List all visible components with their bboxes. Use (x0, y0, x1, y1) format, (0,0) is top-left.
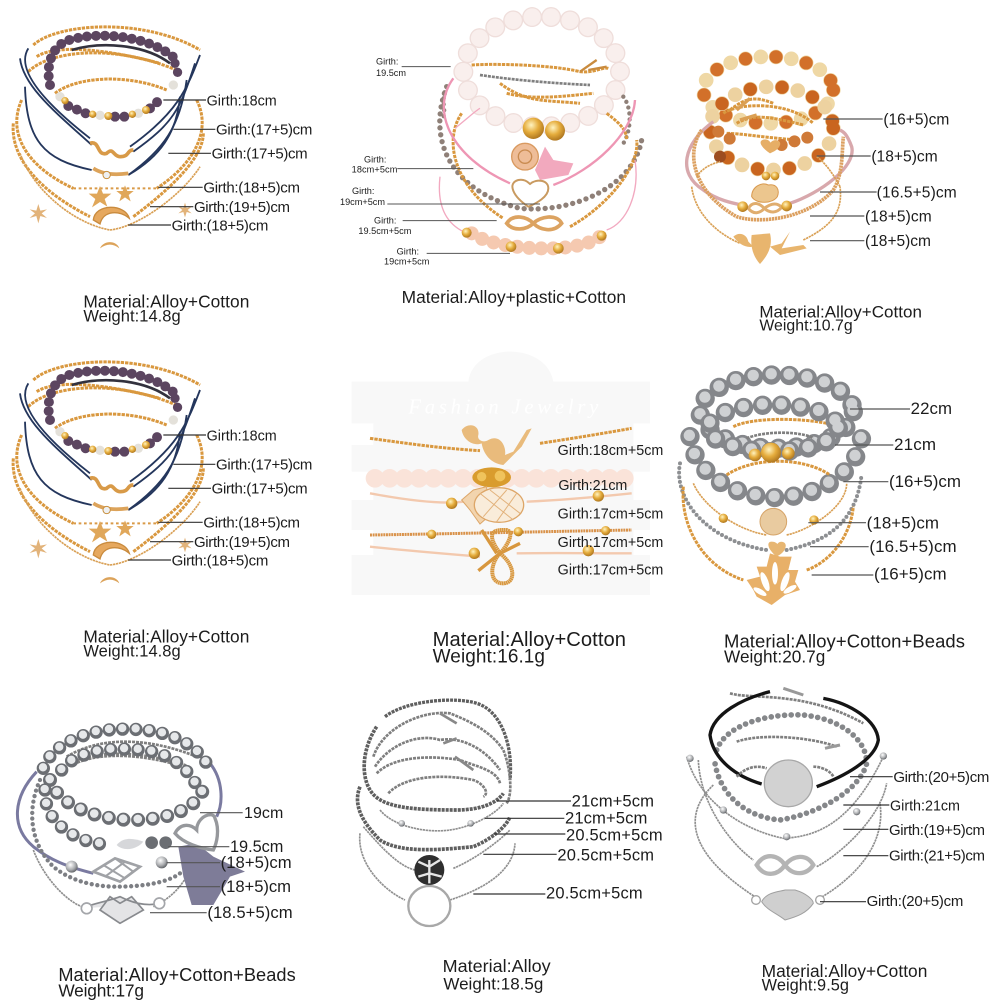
card script title: Fashion Jewelry (407, 396, 599, 418)
girth labels: Girth: (374, 215, 396, 225)
girth labels: 18cm+5cm (352, 165, 398, 175)
girth labels: Girth:21cm (890, 799, 960, 815)
girth labels: Girth:(20+5)cm (867, 893, 963, 910)
display card (352, 352, 650, 595)
artwork: pink bead and heart set (439, 17, 642, 254)
girth labels: 21cm+5cm (572, 792, 654, 811)
girth labels (808, 399, 961, 584)
artwork: flamingo, rose, pineapple and bow bracelets (370, 425, 632, 583)
girth labels: Girth:(17+5)cm (212, 481, 308, 498)
artwork: black cord, infinity and hamsa set (686, 688, 887, 920)
girth labels: (16.5+5)cm (877, 184, 957, 201)
girth labels: Girth:18cm (207, 93, 277, 109)
material and weight: Weight:10.7g (759, 318, 853, 335)
girth labels: (18.5+5)cm (207, 903, 293, 922)
girth labels: Girth:21cm (558, 478, 627, 494)
girth labels: Girth:(21+5)cm (889, 848, 985, 865)
panel: bracelet set 8 (357, 700, 663, 993)
girth labels: 19cm+5cm (340, 197, 385, 207)
girth labels: 19.5cm (230, 838, 283, 856)
girth labels: (16+5)cm (883, 111, 949, 128)
artwork: amber bead set (687, 57, 852, 264)
material and weight: Weight:20.7g (724, 647, 825, 667)
material and weight: Material:Alloy (443, 956, 551, 976)
artwork: navy cord and purple bead gold set (13, 27, 203, 248)
girth labels: Girth: (397, 246, 419, 256)
girth labels: Girth: (376, 56, 398, 66)
material and weight (762, 961, 927, 995)
girth labels: (16.5+5)cm (869, 537, 957, 556)
girth labels: Girth:(18+5)cm (203, 180, 300, 197)
girth labels: 20.5cm+5cm (557, 846, 654, 864)
girth labels (473, 792, 663, 903)
girth labels (150, 805, 293, 922)
girth labels: 19cm (244, 805, 283, 822)
artwork: silver ball and lotus set (679, 374, 862, 605)
girth labels (128, 93, 312, 234)
material and weight: Material:Alloy+Cotton+Beads (724, 631, 965, 652)
panel: bracelet set 2 (340, 17, 642, 307)
material and weight: Material:Alloy+Cotton (83, 292, 249, 312)
girth labels: 22cm (911, 399, 952, 418)
girth labels: 20.5cm+5cm (546, 885, 643, 903)
panel: bracelet set 5 on card (352, 352, 663, 668)
panel: bracelet set 9 (686, 688, 989, 995)
girth labels: (18+5)cm (865, 208, 932, 225)
girth labels: (18+5)cm (867, 514, 939, 533)
material and weight: Material:Alloy+Cotton (759, 302, 922, 321)
girth labels (810, 111, 957, 250)
material and weight: Material:Alloy+Cotton (762, 961, 927, 981)
panel: bracelet set 6 (679, 374, 965, 667)
material and weight (58, 965, 296, 1000)
girth labels: Girth:17cm+5cm (558, 562, 663, 578)
girth labels: 19cm+5cm (384, 257, 430, 267)
girth labels (340, 56, 540, 267)
panel: bracelet set 4 (13, 362, 312, 661)
material and weight: Weight:17g (58, 980, 144, 1000)
girth labels: (18+5)cm (871, 148, 938, 165)
panel: bracelet set 3 (687, 57, 957, 335)
girth labels: (18+5)cm (221, 853, 292, 872)
girth labels (820, 769, 989, 910)
material and weight: Material:Alloy+Cotton (83, 627, 249, 647)
girth labels: Girth:(17+5)cm (216, 457, 312, 474)
girth labels: Girth: (352, 186, 374, 196)
girth labels: Girth: (364, 155, 386, 165)
material and weight: Weight:14.8g (83, 308, 181, 326)
material and weight (724, 631, 965, 667)
girth labels: 20.5cm+5cm (566, 826, 663, 844)
panel: bracelet set 1 (13, 27, 312, 326)
girth labels: Girth:(17+5)cm (212, 146, 308, 163)
girth labels: Girth:(18+5)cm (172, 552, 268, 569)
girth labels: Girth:(19+5)cm (194, 534, 290, 551)
material and weight: Material:Alloy+Cotton (433, 629, 626, 651)
artwork: navy cord and purple bead gold set (13, 362, 203, 583)
material and weight (759, 302, 922, 335)
material and weight (83, 627, 249, 661)
girth labels: Girth:(18+5)cm (203, 515, 300, 532)
girth labels: (16+5)cm (874, 565, 947, 584)
girth labels: Girth:(19+5)cm (194, 199, 290, 216)
material and weight (433, 629, 626, 668)
girth labels: Girth:(17+5)cm (216, 122, 312, 139)
material and weight: Weight:14.8g (83, 643, 181, 661)
girth labels: 21cm (894, 435, 936, 454)
artwork: silver chain set with tree and ring (357, 700, 515, 926)
material and weight (83, 292, 249, 326)
material and weight: Weight:18.5g (443, 974, 543, 993)
girth labels (558, 443, 663, 578)
girth labels: Girth:(19+5)cm (889, 822, 985, 839)
girth labels: 21cm+5cm (565, 809, 647, 828)
material and weight: Weight:9.5g (762, 977, 849, 995)
panel: bracelet set 7 (17, 728, 296, 1000)
girth labels: Girth:(20+5)cm (893, 769, 989, 786)
artwork: silver bead and tassel set (17, 728, 245, 923)
girth labels: 19.5cm (376, 68, 406, 78)
girth labels (128, 428, 312, 569)
girth labels: Girth:18cm (207, 428, 277, 444)
girth labels: (16+5)cm (889, 472, 961, 491)
material and weight: Material:Alloy+Cotton+Beads (58, 965, 296, 985)
girth labels: Girth:18cm+5cm (558, 443, 663, 459)
girth labels: Girth:17cm+5cm (558, 506, 663, 522)
girth labels: Girth:17cm+5cm (558, 535, 663, 551)
girth labels: (18+5)cm (221, 877, 291, 896)
material and weight (443, 956, 551, 993)
girth labels: (18+5)cm (865, 233, 931, 250)
material: Material:Alloy+plastic+Cotton (402, 287, 626, 307)
material and weight: Weight:16.1g (433, 647, 545, 668)
girth labels: 19.5cm+5cm (358, 226, 412, 236)
girth labels: Girth:(18+5)cm (172, 217, 268, 234)
